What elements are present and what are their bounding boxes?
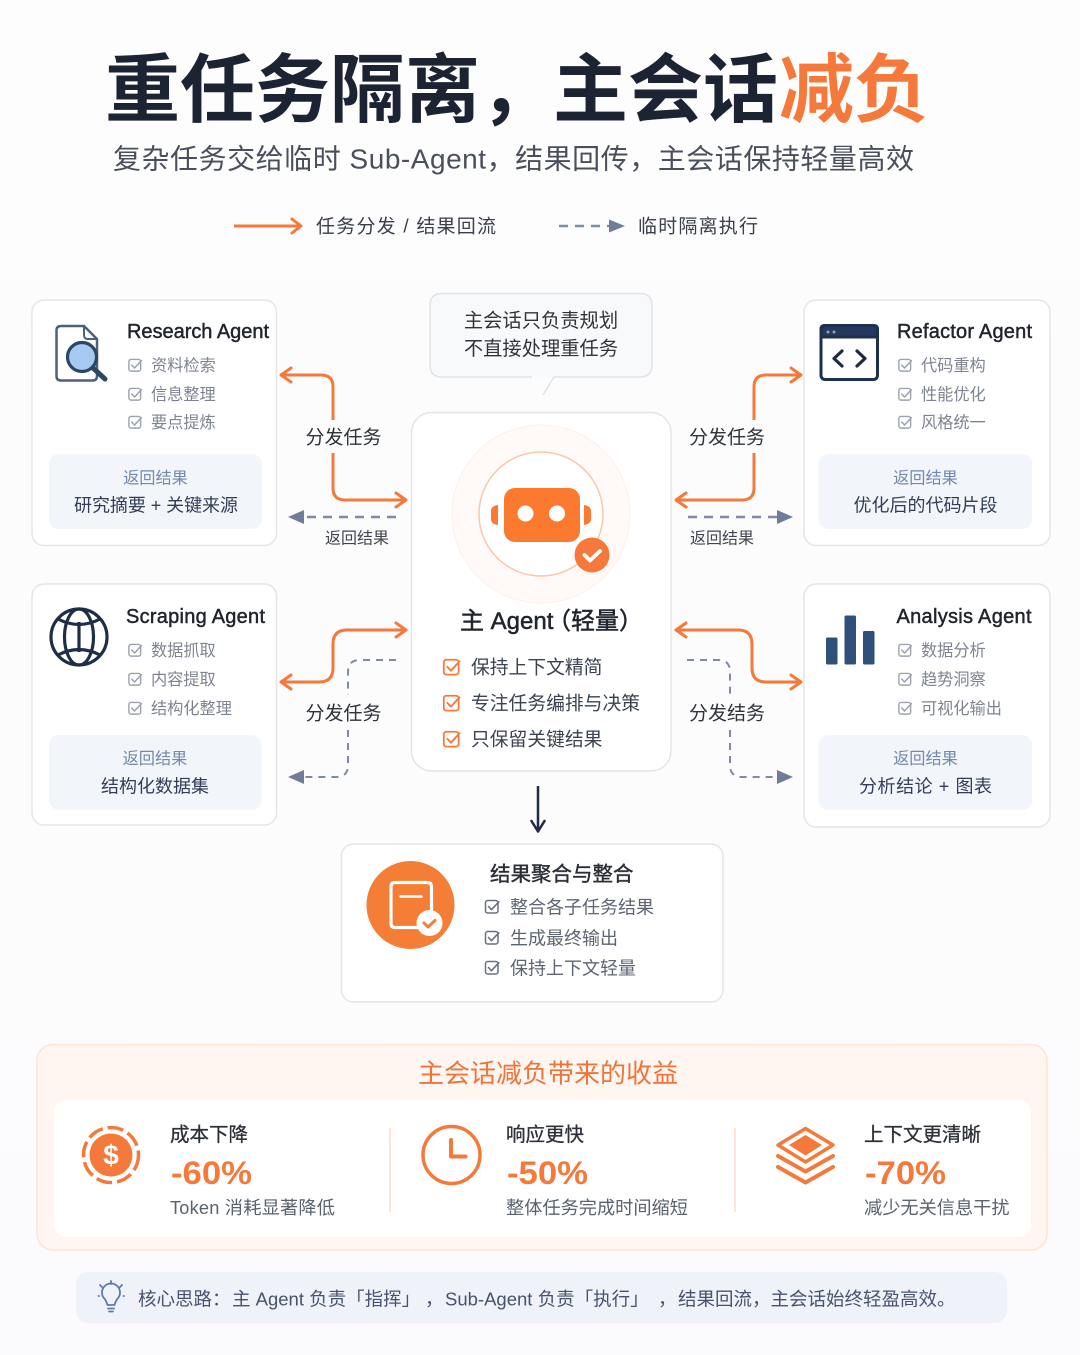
divider [390, 1128, 735, 1212]
label: research dispatch: 分发任务 [305, 426, 382, 448]
icon: layers [778, 1128, 833, 1182]
tip text: 核心思路： [138, 1288, 231, 1309]
main agent list [444, 656, 640, 750]
return box: 返回结果 [123, 470, 188, 488]
main agent list: 保持上下文精简 [471, 656, 602, 678]
return box: 返回结果 [893, 750, 958, 768]
aggregation list [486, 898, 654, 978]
icon: clock [423, 1126, 480, 1184]
label: research return: 返回结果 [325, 530, 389, 548]
icon: globe [51, 609, 107, 665]
task list: 资料检索 [151, 357, 216, 375]
legend: dashed arrow [559, 220, 625, 232]
tip text: 结果回流，主会话始终轻盈高效。 [678, 1288, 956, 1309]
arrow: down to aggregation [532, 786, 544, 832]
label: scraping dispatch: 分发任务 [305, 702, 382, 724]
return box [818, 735, 1032, 810]
return box: 返回结果 [893, 470, 958, 488]
tip text: ， [425, 1288, 444, 1309]
label: analysis dispatch: 分发结务 [689, 702, 765, 724]
benefit: speed: 整体任务完成时间缩短 [506, 1198, 688, 1218]
connector: analysis [676, 623, 801, 784]
connector: refactor [676, 368, 801, 524]
aggregation list: 整合各子任务结果 [510, 898, 654, 918]
legend: isolated execution label: 临时隔离执行 [638, 216, 758, 238]
subtitle: 复杂任务交给临时 Sub-Agent，结果回传，主会话保持轻量高效 [113, 144, 914, 174]
benefit: cost: Token 消耗显著降低 [170, 1198, 335, 1218]
agent name: Research Agent [127, 321, 269, 343]
panel: aggregation [342, 844, 723, 1002]
connector: scraping [281, 623, 406, 784]
icon: dollar coin [84, 1128, 138, 1182]
benefit: cost: -60% [171, 1155, 252, 1191]
panel: Analysis Agent [804, 584, 1050, 827]
benefit: context: -70% [865, 1155, 946, 1191]
task list: 可视化输出 [921, 700, 1002, 718]
task list: 数据抓取 [151, 642, 216, 660]
label: refactor dispatch: 分发任务 [689, 426, 765, 448]
task list [129, 642, 232, 718]
benefit: context: 减少无关信息干扰 [864, 1198, 1010, 1218]
task list [899, 642, 1002, 718]
return box: 研究摘要 + 关键来源 [74, 496, 238, 516]
benefit: speed: -50% [507, 1155, 588, 1191]
return box [49, 454, 262, 529]
icon: document search [56, 326, 105, 380]
task list: 信息整理 [151, 386, 216, 404]
panel: Scraping Agent [32, 584, 276, 825]
title: 重任务隔离， [105, 48, 555, 132]
return box [818, 454, 1032, 529]
label: refactor return: 返回结果 [690, 530, 754, 548]
task list: 要点提炼 [151, 414, 216, 432]
tip text: Sub-Agent 负责「执行」 [445, 1288, 649, 1309]
heading: main agent: （轻量） [547, 608, 643, 634]
title: 主会话 [553, 48, 778, 132]
heading: benefits: 主会话减负带来的收益 [418, 1058, 678, 1088]
legend: orange arrow [234, 219, 301, 233]
return box: 返回结果 [123, 750, 187, 768]
panel: Research Agent [32, 300, 276, 546]
return box [49, 735, 262, 810]
agent name: Refactor Agent [897, 321, 1032, 343]
task list: 风格统一 [921, 414, 986, 432]
tip text: ， [658, 1288, 677, 1309]
benefit: context [778, 1124, 1010, 1218]
task list: 内容提取 [151, 671, 216, 689]
panel: main agent [412, 412, 671, 771]
callout [430, 294, 652, 395]
icon: code window [821, 326, 878, 380]
benefit: speed: 响应更快 [506, 1124, 584, 1146]
benefit: speed [423, 1124, 688, 1218]
icon: light bulb [98, 1281, 124, 1312]
heading: main agent: 主 Agent [460, 608, 554, 634]
legend: dispatch label: 任务分发 / 结果回流 [316, 216, 496, 238]
icon: dollar coin: $ [103, 1140, 119, 1170]
task list: 结构化整理 [151, 700, 232, 718]
benefits inner card [54, 1100, 1031, 1237]
task list [899, 357, 986, 432]
task list: 趋势洞察 [921, 671, 986, 689]
benefit: cost [84, 1124, 335, 1218]
icon: bar chart [826, 616, 874, 664]
return box: 分析结论 + 图表 [859, 776, 992, 796]
task list [129, 357, 216, 432]
title: 减负 [779, 48, 929, 132]
task list: 性能优化 [921, 386, 986, 404]
main agent list: 专注任务编排与决策 [471, 692, 640, 714]
task list: 代码重构 [921, 357, 986, 375]
aggregation list: 生成最终输出 [510, 928, 618, 948]
main agent list: 只保留关键结果 [471, 728, 603, 750]
connector: research [281, 368, 406, 524]
tip bar [76, 1272, 1007, 1323]
tip text: 主 Agent 负责「指挥」 [232, 1288, 420, 1309]
benefit: cost: 成本下降 [170, 1124, 248, 1146]
heading: aggregation: 结果聚合与整合 [490, 863, 634, 886]
callout: 主会话只负责规划 [464, 310, 618, 332]
callout: 不直接处理重任务 [464, 338, 618, 360]
icon: robot [452, 425, 630, 603]
agent name: Analysis Agent [896, 606, 1032, 628]
panel: benefits [37, 1044, 1047, 1250]
return box: 优化后的代码片段 [854, 496, 998, 516]
benefit: context: 上下文更清晰 [864, 1124, 981, 1146]
legend [234, 216, 758, 238]
icon: document check [366, 861, 454, 949]
agent name: Scraping Agent [126, 606, 265, 628]
aggregation list: 保持上下文轻量 [510, 958, 636, 978]
task list: 数据分析 [921, 642, 986, 660]
return box: 结构化数据集 [101, 776, 209, 796]
panel: Refactor Agent [804, 300, 1050, 546]
